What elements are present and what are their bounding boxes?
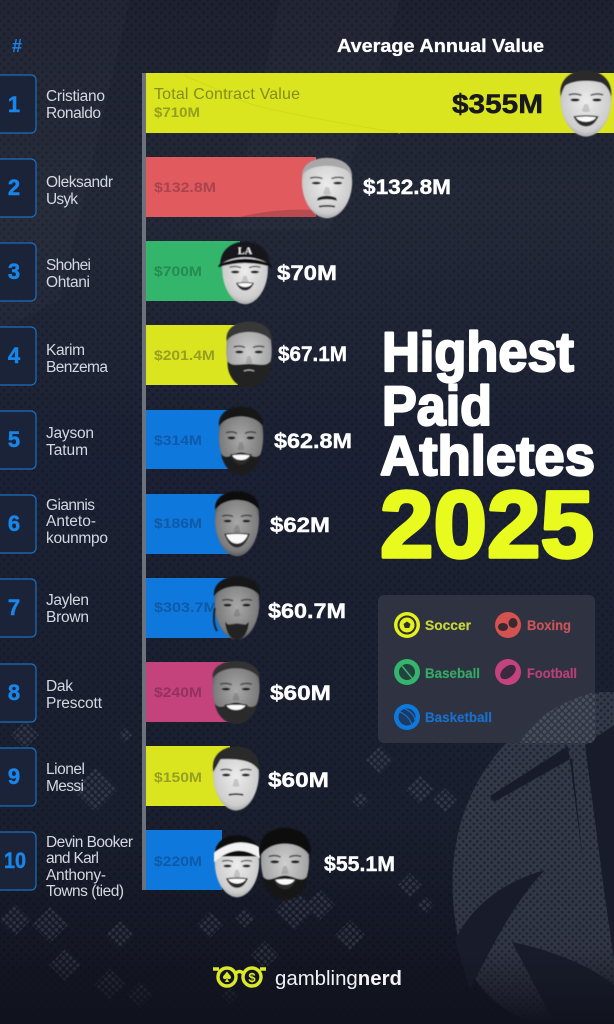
legend: baseball [394, 659, 480, 685]
average annual value labels: $132.8M [363, 176, 451, 199]
bar: Messi [146, 746, 230, 806]
average annual value labels [268, 176, 451, 876]
rank 7: Jaylen [46, 592, 89, 609]
rank 6: kounmpo [46, 530, 108, 547]
rank 5: Jayson [46, 425, 94, 442]
rank 10: Devin Booker [46, 834, 133, 851]
rank 5: Tatum [46, 442, 88, 459]
average annual value labels: $60.7M [268, 600, 346, 623]
rank 3: 3 [8, 259, 20, 284]
icon: glasses [213, 968, 266, 986]
bar: Messi: $150M [154, 770, 202, 785]
axis line [142, 73, 146, 890]
face: Towns [259, 828, 311, 900]
legend: soccer: Soccer [425, 617, 472, 633]
bar: Ronaldo [146, 73, 614, 133]
average annual value labels: $62M [270, 514, 330, 537]
wordmark: gamblingnerd [275, 968, 402, 990]
bar: Brown [146, 578, 230, 638]
bar: Booker and Towns: $220M [154, 854, 202, 869]
bar chart [146, 73, 614, 890]
rank 10: 10 [4, 848, 26, 873]
face: Giannis [215, 491, 259, 556]
rank 3 [0, 243, 91, 301]
halftone blobs [0, 490, 480, 1008]
title: Paid [382, 374, 492, 437]
column header: rank: # [12, 36, 22, 56]
rank 3: Shohei [46, 257, 91, 274]
bar: Giannis: $186M [154, 516, 202, 531]
rank 9 [0, 748, 85, 806]
bar: Tatum: $314M [154, 433, 202, 448]
legend panel [378, 595, 595, 743]
rank 6: 6 [8, 511, 20, 536]
average annual value labels: $62.8M [274, 430, 352, 453]
legend: basketball: Basketball [425, 709, 492, 725]
average annual value labels: $67.1M [278, 343, 347, 366]
rank 5: 5 [8, 427, 20, 452]
bar: Usyk: $132.8M [154, 180, 216, 195]
bar: Ronaldo: Total Contract Value [154, 86, 300, 103]
rank 4: 4 [8, 343, 21, 368]
rank 4: Benzema [46, 359, 108, 376]
rank 1 [0, 75, 105, 133]
rank 8: Dak [46, 678, 73, 695]
rank 6: Anteto- [46, 513, 96, 530]
rank 10 [0, 832, 133, 900]
bar: Ronaldo: $710M [154, 105, 200, 120]
rank 1: 1 [8, 92, 20, 117]
rank 9: 9 [8, 764, 20, 789]
title: Highest [382, 320, 574, 383]
face: Benzema [226, 322, 272, 388]
bar: Ohtani [146, 241, 240, 301]
face: Booker [214, 835, 260, 897]
legend: baseball: Baseball [425, 665, 480, 681]
bar: Usyk [146, 157, 316, 217]
average annual value labels: $60M [270, 682, 331, 705]
legend: boxing [495, 612, 571, 638]
legend: boxing: Boxing [527, 617, 571, 633]
logo: gamblingnerd [213, 968, 402, 990]
bar: Prescott: $240M [154, 685, 202, 700]
rank 5 [0, 411, 94, 469]
title: Athletes [380, 424, 595, 487]
title: 2025 [380, 472, 594, 578]
average annual value labels: $55.1M [324, 853, 395, 876]
rank 4 [0, 327, 108, 385]
column header: average annual value: Average Annual Value [337, 36, 544, 56]
bar: Tatum [146, 410, 232, 469]
rank 8: 8 [8, 680, 20, 705]
rank 6 [0, 495, 108, 553]
rank 10: and Karl [46, 850, 99, 867]
rank 2: 2 [8, 175, 20, 200]
average annual value labels: $60M [268, 769, 329, 792]
bar: Giannis [146, 494, 230, 554]
bar: Benzema: $201.4M [154, 348, 215, 363]
rank boxes and names [0, 75, 133, 900]
face: Usyk [302, 158, 352, 218]
face: Prescott [212, 661, 260, 724]
bar: Brown: $303.7M [154, 600, 217, 615]
face: Ohtani: LA [238, 246, 253, 257]
rank 6: Giannis [46, 497, 95, 514]
bar: Prescott [146, 662, 230, 722]
rank 10: Anthony- [46, 867, 106, 884]
rank 1: Cristiano [46, 88, 105, 105]
rank 2: Oleksandr [46, 174, 113, 191]
legend: soccer [394, 612, 472, 638]
legend: football [495, 659, 577, 685]
rank 7: Brown [46, 609, 89, 626]
title [380, 320, 595, 578]
bar: Ronaldo: $355M [452, 89, 543, 119]
legend: basketball [394, 704, 492, 730]
rank 10: Towns (tied) [46, 883, 124, 900]
rank 8: Prescott [46, 695, 103, 712]
rank 8 [0, 664, 103, 722]
bar: Ohtani: $700M [154, 264, 202, 279]
rank 7 [0, 579, 89, 637]
rank 9: Lionel [46, 761, 85, 778]
average annual value labels: $70M [277, 262, 337, 285]
face: Messi [213, 747, 259, 811]
rank 1: Ronaldo [46, 105, 101, 122]
rank 4: Karim [46, 342, 85, 359]
icon: glasses: $ [248, 970, 256, 985]
rank 3: Ohtani [46, 274, 90, 291]
rank 2: Usyk [46, 191, 78, 208]
face: Ronaldo [560, 70, 612, 137]
rank 2 [0, 159, 113, 217]
face: Tatum [219, 406, 263, 475]
face: Brown [214, 576, 260, 640]
bar: Booker and Towns [146, 830, 222, 890]
football silhouette [452, 692, 614, 1024]
rank 9: Messi [46, 778, 84, 795]
legend: football: Football [527, 665, 577, 681]
rank 7: 7 [8, 595, 20, 620]
bar: Benzema [146, 325, 238, 385]
face: Ohtani [218, 242, 272, 304]
